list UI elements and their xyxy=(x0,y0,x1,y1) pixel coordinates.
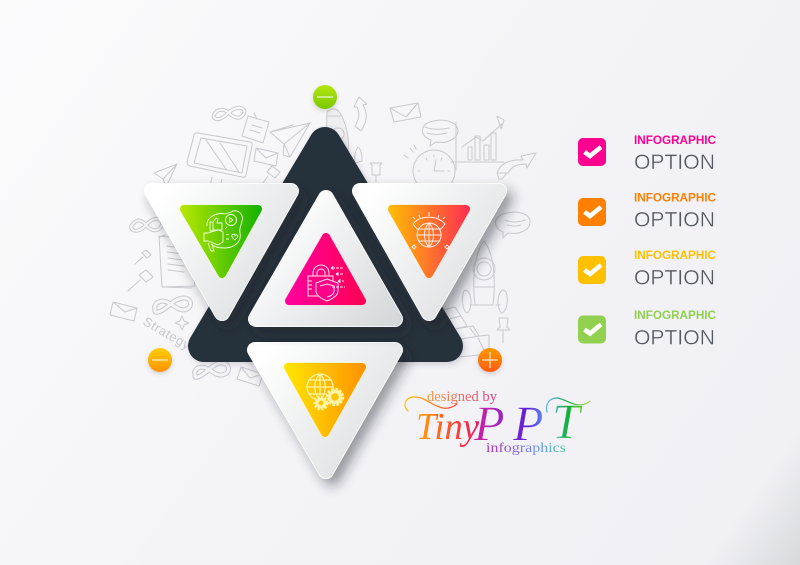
logo: designed by Tiny PPT infographics: infographics xyxy=(486,441,566,456)
legend item 1: INFOGRAPHIC xyxy=(634,133,716,147)
legend item 2 xyxy=(578,190,716,232)
doodle: curved arrow xyxy=(354,97,367,131)
icon: lock with shield xyxy=(308,265,345,301)
logo swashes xyxy=(405,397,590,412)
doodle: envelope top right xyxy=(390,103,421,122)
colour triangle right xyxy=(392,209,466,274)
logo: designed by Tiny PPT infographics: P xyxy=(473,395,505,451)
logo: designed by Tiny PPT infographics xyxy=(405,389,590,456)
legend item 4: INFOGRAPHIC xyxy=(634,308,716,322)
doodle: pins left xyxy=(128,250,153,291)
legend item 3 xyxy=(578,248,716,290)
doodle: envelope bottom xyxy=(237,367,263,386)
panel: center triangle xyxy=(256,198,395,319)
doodle: infinity bottom xyxy=(195,363,229,377)
dark triangle xyxy=(204,143,447,346)
legend item 3: INFOGRAPHIC xyxy=(634,248,716,262)
badge: orange plus xyxy=(478,348,502,372)
white card center xyxy=(256,198,395,319)
legend item 1: OPTION xyxy=(634,151,715,174)
icon: globe with gears xyxy=(307,374,344,410)
icon: globe and eye xyxy=(412,212,449,249)
doodle: star xyxy=(175,316,189,330)
legend item 2: INFOGRAPHIC xyxy=(634,190,716,204)
logo: designed by Tiny PPT infographics: Tiny xyxy=(416,406,479,448)
doodle: infinity top xyxy=(214,108,244,119)
panel: right triangle xyxy=(360,191,499,313)
doodle: paper planes xyxy=(270,123,310,157)
doodle: big arrow right xyxy=(497,153,536,179)
white card bottom xyxy=(255,350,395,471)
doodle: speech bubble xyxy=(422,120,458,146)
badge: green minus xyxy=(313,85,337,109)
legend item 4: OPTION xyxy=(634,326,715,350)
doodle: pin right xyxy=(497,318,510,343)
doodle: strategy word: Strategy xyxy=(140,314,193,353)
panel: bottom triangle xyxy=(255,350,395,471)
logo text: designed by xyxy=(427,389,498,405)
white card right xyxy=(360,191,499,313)
legend item 4 xyxy=(578,308,716,350)
colour triangle left xyxy=(184,209,258,274)
doodle: infinity left xyxy=(131,219,162,231)
doodle sketches behind the diagram xyxy=(110,97,536,386)
doodle: document xyxy=(159,235,195,288)
badge: yellow minus xyxy=(148,348,172,372)
colour triangle bottom xyxy=(288,367,362,433)
logo: designed by Tiny PPT infographics: P xyxy=(512,395,544,451)
doodle: clock xyxy=(404,145,455,192)
white card left xyxy=(152,191,291,313)
doodle: stairs xyxy=(443,307,489,357)
icon: megaphone social xyxy=(204,211,242,251)
legend item 2: OPTION xyxy=(634,208,715,232)
doodle: small rocket and pin xyxy=(355,147,382,182)
doodle: speech bubble right xyxy=(496,212,530,238)
doodle: infinity lower xyxy=(155,298,191,312)
legend item 3: OPTION xyxy=(634,266,715,290)
doodle: monitor xyxy=(187,133,252,187)
doodle: envelope xyxy=(254,148,278,166)
logo: designed by Tiny PPT infographics: T xyxy=(552,393,583,449)
doodle: bar chart xyxy=(451,116,504,170)
panel: left triangle xyxy=(152,191,291,313)
doodle: note xyxy=(242,113,269,143)
doodle: big rocket right xyxy=(473,241,495,305)
legend item 1 xyxy=(578,133,716,174)
colour triangle center xyxy=(289,237,362,301)
doodle: push pin xyxy=(257,166,280,187)
doodle: envelope lower left xyxy=(110,302,137,321)
legend list xyxy=(578,133,716,350)
doodle: big rocket top xyxy=(326,109,348,151)
